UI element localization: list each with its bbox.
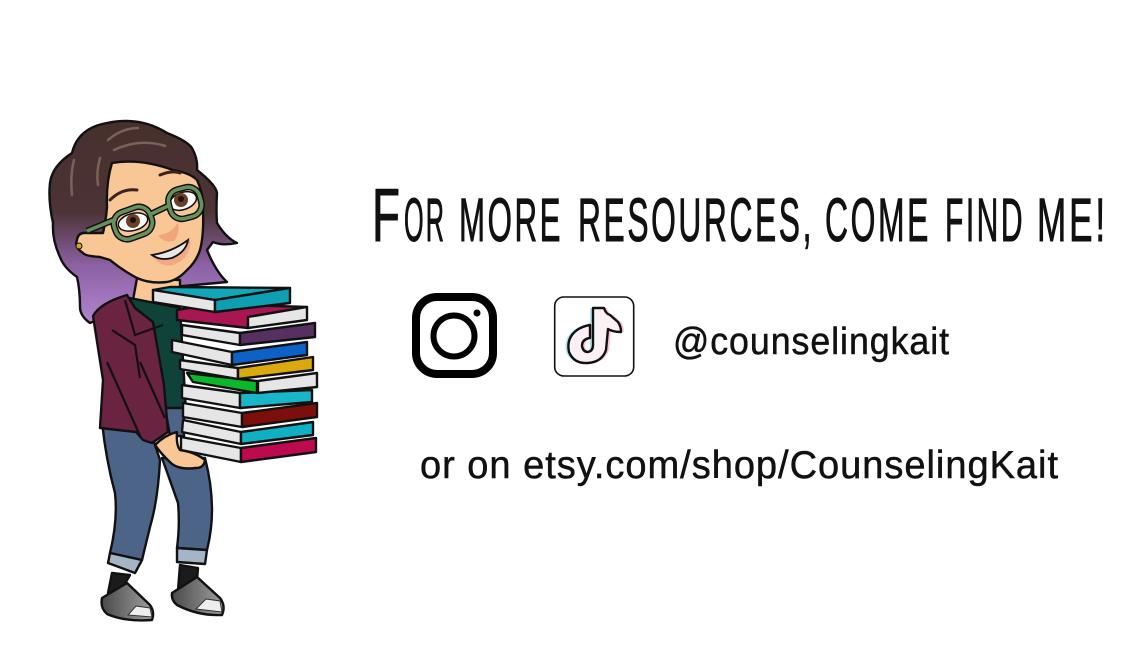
book: top teal: [153, 287, 290, 312]
glasses: [87, 184, 204, 243]
book stack: [153, 287, 317, 462]
earring: [76, 243, 82, 249]
icon: instagram: [416, 297, 493, 374]
right shoe: [172, 577, 224, 615]
neck: [133, 278, 180, 310]
heading: RESOURCES,: [578, 186, 814, 254]
jacket: [93, 295, 168, 443]
nose: [158, 222, 179, 242]
hair highlights: [71, 128, 165, 195]
book: dark red: [183, 403, 317, 427]
left shoe: [102, 583, 153, 620]
icon: tiktok: [555, 297, 634, 376]
heading: [372, 173, 1108, 257]
book: purple: [182, 323, 315, 345]
hand: [155, 432, 205, 468]
book: yellow: [180, 357, 313, 379]
book: light teal: [182, 385, 312, 408]
shirt: [130, 298, 186, 412]
jeans: front leg: [102, 422, 160, 560]
book: teal: [182, 420, 313, 444]
book: green: [187, 373, 317, 393]
jacket details: [107, 300, 165, 438]
illustration: character carrying a stack of books: [49, 121, 317, 620]
jeans: back leg: [162, 458, 212, 550]
social handle: @counselingkait: [673, 321, 950, 363]
hair: [49, 121, 237, 323]
jeans: waist: [165, 408, 184, 436]
heading: MORE: [459, 186, 563, 254]
heading: FIND: [945, 186, 1025, 254]
eyes: [116, 188, 199, 234]
book: magenta: [177, 304, 307, 328]
mouth: [152, 238, 190, 266]
book: crimson: [181, 437, 316, 462]
etsy shop link: or on etsy.com/shop/CounselingKait: [420, 444, 1059, 487]
eyebrows: [110, 172, 180, 200]
heading: COME: [825, 186, 931, 254]
heading: OR: [404, 186, 446, 254]
socks: [108, 565, 198, 593]
jeans cuffs: [108, 548, 207, 573]
face: [76, 162, 203, 282]
heading: F: [372, 173, 400, 257]
book: blue: [172, 340, 307, 365]
